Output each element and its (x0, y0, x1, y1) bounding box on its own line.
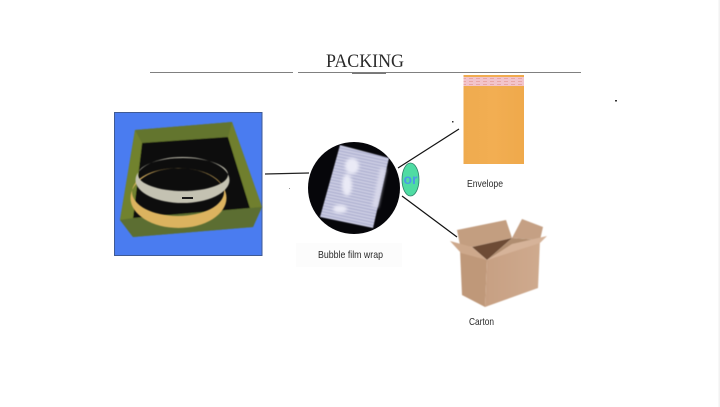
or badge (402, 163, 419, 196)
connector: bubble wrap to carton (402, 196, 457, 237)
connector: bubble wrap to envelope (398, 129, 459, 168)
envelope seal strip (464, 77, 524, 86)
photo: bubble film wrap (308, 142, 400, 234)
label background: bubble film wrap (296, 243, 402, 267)
page edge (718, 0, 720, 407)
bag highlights (333, 158, 386, 213)
or badge: or (404, 171, 418, 187)
label: bubble film wrap: Bubble film wrap (318, 249, 383, 261)
title: PACKING (326, 52, 404, 72)
bangle clasp (182, 197, 193, 199)
title rule (150, 72, 581, 74)
stray marks (289, 100, 617, 189)
silver bangle (135, 157, 230, 203)
gold bangle (130, 168, 226, 228)
photo: carton (450, 219, 547, 307)
envelope body (464, 75, 524, 164)
blue photo background (114, 112, 262, 256)
connector: box to bubble wrap (265, 173, 309, 174)
photo: bangles in green box (114, 112, 262, 256)
label: envelope: Envelope (467, 178, 503, 190)
label: carton: Carton (469, 316, 494, 328)
bubble wrap bag (320, 145, 389, 228)
photo: envelope (464, 75, 524, 164)
black circle (308, 142, 400, 234)
green gift box (120, 122, 262, 237)
